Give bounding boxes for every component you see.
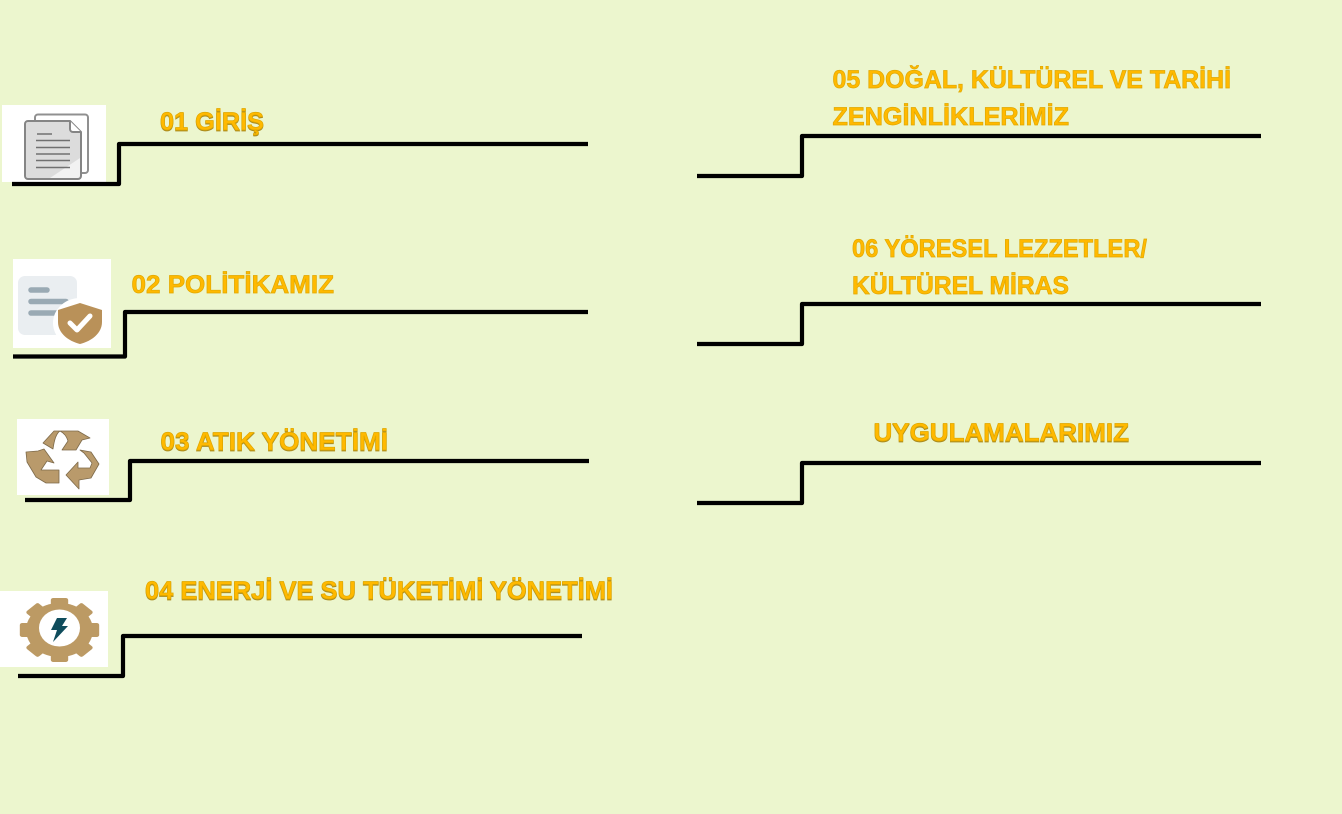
icon: documents [2,105,106,182]
stepped line 06 [697,304,1261,344]
heading: 01 giriş: 01 GİRİŞ [160,108,264,136]
stepped line 01 [12,144,588,184]
stepped line 07 [697,463,1261,503]
stepped line 02 [13,312,588,356]
stepped line 03 [25,461,589,500]
item 04: enerji ve su [0,576,613,676]
item 01: giriş [2,105,588,184]
icon: energy gear [0,591,108,667]
item 02: politikamız [13,259,588,356]
icon: recycling arrows [17,419,109,495]
heading: 04 enerji ve su tüketimi yönetimi: 04 ENERJİ VE SU TÜKETİMİ YÖNETİMİ [145,576,613,605]
heading: 03 atık yönetimi: 03 ATIK YÖNETİMİ [160,427,388,456]
heading: uygulamalarımız: UYGULAMALARIMIZ [874,419,1129,447]
heading: 05 line 1: 05 DOĞAL, KÜLTÜREL VE TARİHİ [832,65,1231,94]
stepped line 04 [18,636,582,676]
item 06: yöresel lezzetler [697,234,1261,344]
stepped line 05 [697,136,1261,176]
heading: 02 politikamız: 02 POLİTİKAMIZ [132,271,334,299]
icon: policy shield [13,259,111,348]
item 05: doğal, kültürel ve tarihi zenginlikler [697,65,1261,176]
heading: 06 line 2: KÜLTÜREL MİRAS [852,271,1069,300]
heading: 05 line 2: ZENGİNLİKLERİMİZ [832,103,1069,131]
heading: 06 line 1: 06 YÖRESEL LEZZETLER/ [852,234,1147,263]
item 03: atık yönetimi [17,419,589,500]
item 07: uygulamalarımız [697,419,1261,503]
